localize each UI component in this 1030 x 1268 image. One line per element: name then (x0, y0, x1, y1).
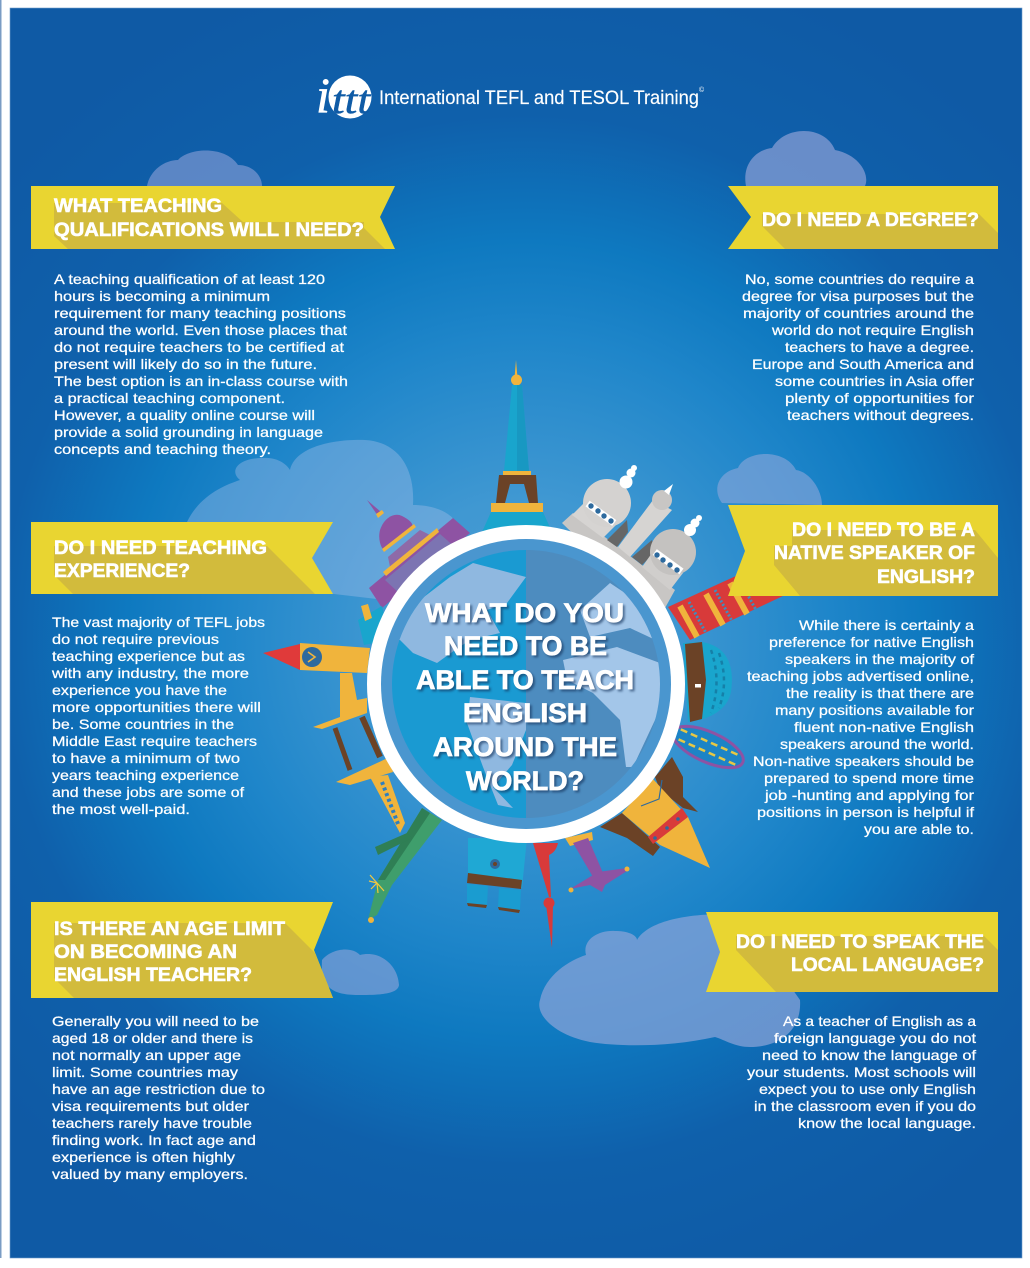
panel: age limit (31, 902, 360, 1182)
body text: positions in person is helpful if (757, 804, 974, 820)
body text: experience is often highly (52, 1149, 235, 1165)
body text: a practical teaching component. (54, 390, 285, 406)
body text: know the local language. (798, 1115, 976, 1131)
cloud: mid right (717, 454, 822, 505)
body text: As a teacher of English as a (783, 1013, 976, 1029)
landmark: small cyan tower (358, 604, 390, 645)
panel: teaching experience (31, 522, 333, 817)
body text: the reality is that there are (786, 685, 974, 701)
body text: Middle East require teachers (52, 733, 257, 749)
body text: aged 18 or older and there is (52, 1030, 253, 1046)
body text: teachers to have a degree. (785, 339, 974, 355)
logo: ITTT: International TEFL and TESOL Training (379, 87, 699, 109)
heading (54, 538, 267, 582)
body text: Generally you will need to be (52, 1013, 259, 1029)
body text: preference for native English (769, 634, 974, 650)
body text: some countries in Asia offer (775, 373, 974, 389)
landmark: cathedral (467, 838, 527, 913)
central title: ENGLISH (463, 698, 587, 728)
body text: experience you have the (52, 682, 227, 698)
body text (51, 614, 265, 817)
heading (774, 520, 975, 588)
panel: local language (706, 912, 998, 1131)
body text: your students. Most schools will (747, 1064, 976, 1080)
body text: have an age restriction due to (52, 1081, 265, 1097)
ribbon (728, 186, 998, 249)
landmark: domed temple (600, 757, 710, 868)
body text: provide a solid grounding in language (54, 424, 323, 440)
body text (742, 271, 974, 423)
body text: do not require teachers to be certified at (54, 339, 344, 355)
body text: requirement for many teaching positions (54, 305, 346, 321)
heading: ENGLISH? (877, 567, 975, 588)
body text: limit. Some countries may (52, 1064, 238, 1080)
ribbon (728, 505, 998, 596)
heading: NATIVE SPEAKER OF (774, 543, 975, 564)
body text: plenty of opportunities for (785, 390, 974, 406)
body text: in the classroom even if you do (754, 1098, 976, 1114)
body text: majority of countries around the (743, 305, 974, 321)
landmark: pointed clock tower (263, 643, 370, 673)
body text: around the world. Even those places that (54, 322, 347, 338)
cloud: top right (745, 131, 866, 186)
body text: Non-native speakers should be (753, 753, 974, 769)
ribbon (31, 186, 395, 249)
body text: foreign language you do not (774, 1030, 976, 1046)
panel: degree (728, 186, 998, 423)
body text: years teaching experience (52, 767, 239, 783)
body text: Europe and South America and (752, 356, 974, 372)
body text (747, 1013, 976, 1131)
central title: NEED TO BE (444, 631, 607, 661)
central title (416, 598, 634, 796)
heading: DO I NEED TO SPEAK THE (736, 932, 984, 953)
central title: AROUND THE (433, 732, 617, 762)
body text: job -hunting and applying for (764, 787, 974, 803)
heading: DO I NEED TEACHING (54, 538, 267, 559)
heading: EXPERIENCE? (54, 561, 190, 582)
logo: ITTT: i (316, 67, 330, 123)
body text: do not require previous (52, 631, 219, 647)
body text: the most well-paid. (52, 801, 190, 817)
body text: concepts and teaching theory. (54, 441, 271, 457)
body text: not normally an upper age (52, 1047, 241, 1063)
logo: ITTT: ttt (332, 77, 371, 122)
heading: ON BECOMING AN (54, 942, 237, 963)
logo: ITTT (316, 67, 705, 123)
body text: valued by many employers. (52, 1166, 248, 1182)
body text: teaching experience but as (52, 648, 245, 664)
body text: with any industry, the more (51, 665, 249, 681)
body text: fluent non-native English (794, 719, 974, 735)
body text: and these jobs are some of (52, 784, 244, 800)
cloud: small lower left (322, 950, 399, 995)
central title: ABLE TO TEACH (416, 665, 634, 695)
body text (52, 1013, 265, 1182)
body text: you are able to. (864, 821, 974, 837)
landmark: Christ the Redeemer (565, 832, 630, 892)
heading: IS THERE AN AGE LIMIT (54, 919, 285, 940)
page frame edge (0, 0, 2, 1258)
landmark: mosque (562, 465, 702, 608)
heading (54, 196, 364, 241)
panel: teaching qualifications (31, 186, 395, 457)
cloud: lower right (539, 914, 800, 1047)
central title: WORLD? (466, 766, 584, 796)
body text: visa requirements but older (52, 1098, 249, 1114)
landmark: Gherkin (667, 718, 749, 776)
heading: DO I NEED TO BE A (792, 520, 975, 541)
body text: world do not require English (771, 322, 974, 338)
body text: expect you to use only English (759, 1081, 976, 1097)
body text: hours is becoming a minimum (54, 288, 270, 304)
body text: No, some countries do require a (745, 271, 974, 287)
heading (54, 919, 285, 986)
heading: QUALIFICATIONS WILL I NEED? (54, 220, 364, 241)
body text: degree for visa purposes but the (742, 288, 974, 304)
landmark: Capitol building (367, 500, 470, 608)
body text: A teaching qualification of at least 120 (54, 271, 325, 287)
body text: present will likely do so in the future. (54, 356, 317, 372)
landmark: Colosseum (683, 642, 732, 722)
heading: LOCAL LANGUAGE? (791, 955, 984, 976)
body text: need to know the language of (762, 1047, 976, 1063)
heading: WHAT TEACHING (54, 196, 222, 217)
landmark: Golden Gate bridge (313, 673, 405, 833)
heading: DO I NEED A DEGREE? (762, 210, 979, 231)
body text: While there is certainly a (799, 617, 974, 633)
body text (747, 617, 974, 837)
body text: more opportunities there will (52, 699, 261, 715)
body text: The best option is an in-class course with (54, 373, 348, 389)
landmark: red TV tower (533, 843, 558, 948)
body text: prepared to spend more time (764, 770, 974, 786)
heading: ENGLISH TEACHER? (54, 965, 252, 986)
ribbon (706, 912, 998, 992)
body text: However, a quality online course will (54, 407, 315, 423)
cloud: top left (147, 150, 262, 186)
cloud: mid left (187, 440, 470, 600)
logo: ITTT: © (699, 86, 705, 94)
panel: native speaker (728, 505, 998, 837)
landmark: striped tower (668, 565, 785, 640)
ribbon (31, 522, 333, 594)
body text (54, 271, 348, 457)
body text: The vast majority of TEFL jobs (52, 614, 265, 630)
body text: finding work. In fact age and (52, 1132, 256, 1148)
landmark: Statue of Liberty (368, 808, 442, 923)
body text: teaching jobs advertised online, (747, 668, 974, 684)
body text: teachers rarely have trouble (52, 1115, 252, 1131)
central title: WHAT DO YOU (425, 598, 624, 628)
body text: speakers around the world. (780, 736, 974, 752)
ribbon (31, 902, 333, 998)
body text: many positions available for (775, 702, 974, 718)
body text: speakers in the majority of (785, 651, 974, 667)
body text: be. Some countries in the (52, 716, 234, 732)
landmark: Eiffel tower (482, 360, 552, 532)
central globe badge (367, 525, 685, 843)
globe with continents (388, 550, 663, 818)
heading (736, 932, 984, 976)
body text: to have a minimum of two (52, 750, 240, 766)
body text: teachers without degrees. (787, 407, 974, 423)
